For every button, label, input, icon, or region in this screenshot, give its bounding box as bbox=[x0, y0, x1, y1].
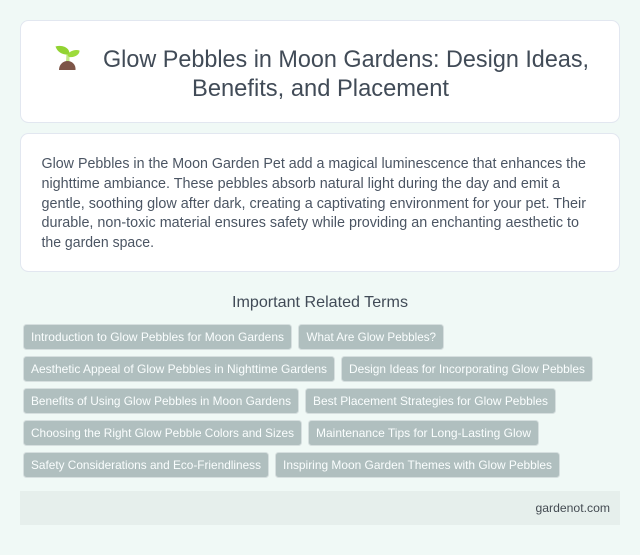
heading: important related terms: Important Related Terms bbox=[232, 294, 408, 311]
text block: description: the garden space. bbox=[42, 235, 154, 251]
panel: description card bbox=[20, 134, 620, 272]
tag: moon garden themes: Inspiring Moon Garden Themes with Glow Pebbles bbox=[283, 458, 552, 472]
tag: maintenance bbox=[308, 420, 538, 446]
tag: aesthetic appeal bbox=[24, 356, 334, 382]
tag: moon garden themes bbox=[276, 452, 560, 478]
title bbox=[103, 46, 589, 102]
tag: colors and sizes bbox=[24, 420, 302, 446]
footer: gardenot.com bbox=[536, 501, 610, 515]
tag: design ideas bbox=[342, 356, 592, 382]
tag: introduction: Introduction to Glow Pebbles for Moon Gardens bbox=[31, 330, 284, 344]
tag: placement strategies: Best Placement Strategies for Glow Pebbles bbox=[313, 394, 548, 408]
text block: description: Glow Pebbles in the Moon Garden Pet add a magical luminescence that enhances the bbox=[42, 156, 586, 172]
tag: placement strategies bbox=[306, 388, 556, 414]
tag: benefits: Benefits of Using Glow Pebbles in Moon Gardens bbox=[31, 394, 291, 408]
tag: introduction bbox=[24, 324, 292, 350]
title: Benefits, and Placement bbox=[192, 75, 449, 102]
footer bbox=[20, 491, 620, 525]
tag: what are glow pebbles bbox=[298, 324, 444, 350]
tag: benefits bbox=[24, 388, 298, 414]
panel: header card bbox=[20, 20, 620, 122]
tag: aesthetic appeal: Aesthetic Appeal of Glow Pebbles in Nighttime Gardens bbox=[31, 362, 327, 376]
panel: related term tags bbox=[24, 324, 592, 478]
tag: safety bbox=[24, 452, 268, 478]
text block: description: durable, non-toxic material ensures safety while providing an enchanting aesthetic to bbox=[42, 215, 579, 231]
text block: description: nighttime ambiance. These pebbles absorb natural light during the day and emit a bbox=[42, 176, 561, 192]
tag: safety: Safety Considerations and Eco-Friendliness bbox=[31, 458, 261, 472]
tag: what are glow pebbles: What Are Glow Pebbles? bbox=[306, 330, 436, 344]
tag: design ideas: Design Ideas for Incorporating Glow Pebbles bbox=[349, 362, 585, 376]
tag: maintenance: Maintenance Tips for Long-Lasting Glow bbox=[316, 426, 531, 440]
icon: seedling bbox=[56, 46, 80, 70]
text block: description bbox=[42, 156, 586, 251]
tag: colors and sizes: Choosing the Right Glow Pebble Colors and Sizes bbox=[31, 426, 294, 440]
title: Glow Pebbles in Moon Gardens: Design Ideas, bbox=[103, 46, 589, 73]
text block: description: gentle, soothing glow after dark, creating a captivating environment for your pet. Their bbox=[42, 196, 586, 212]
